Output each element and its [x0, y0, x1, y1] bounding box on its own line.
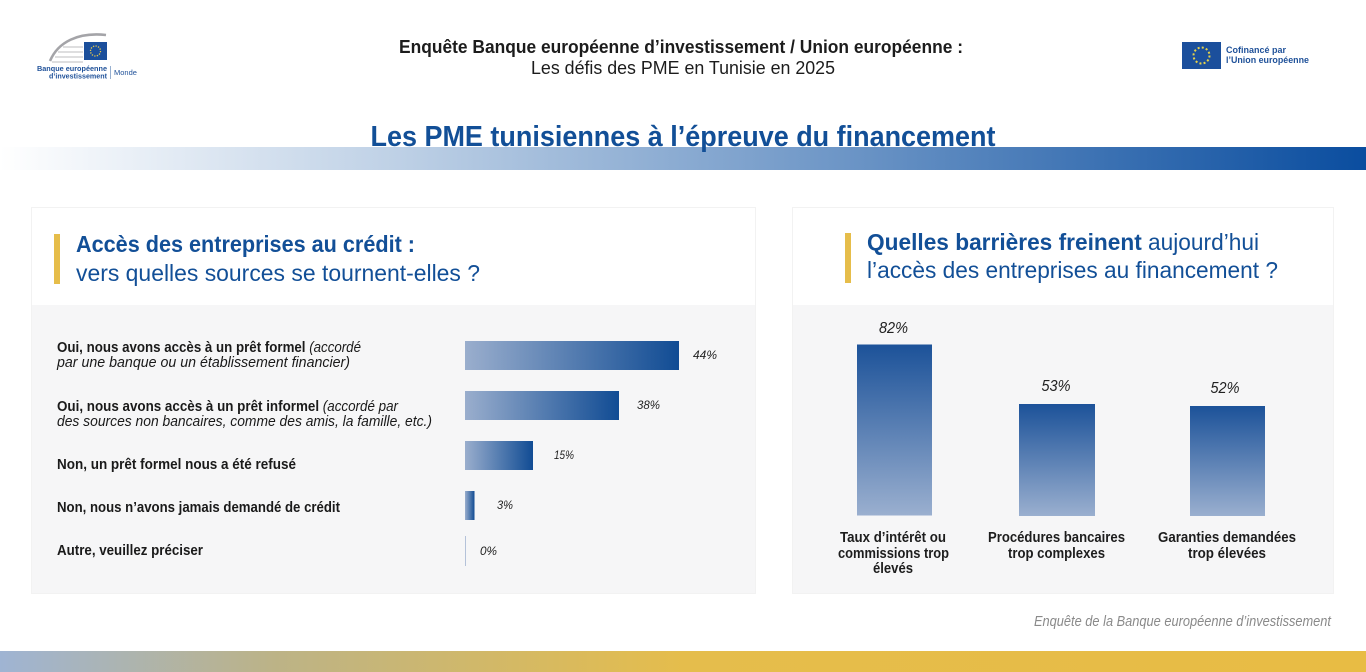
category: complex procedures — [988, 530, 1125, 562]
panel heading: Accès des entreprises au crédit : — [76, 231, 415, 257]
bar chart: barriers: 82% — [879, 320, 908, 337]
logo: Banque européenne d'investissement: Banque européenne — [37, 64, 107, 73]
bar chart: barriers — [857, 320, 1265, 516]
label: other: Autre, veuillez préciser — [57, 543, 203, 559]
logo: Banque européenne d'investissement: d’investissement — [49, 72, 107, 80]
panel: barriers to financing — [792, 208, 1334, 594]
main heading: Les PME tunisiennes à l’épreuve du financement — [370, 121, 996, 153]
label: formal loan: par une banque ou un établissement financier) — [56, 355, 350, 371]
label: informal loan — [57, 399, 432, 430]
bar chart: barriers: 52% — [1210, 380, 1240, 397]
accent bar — [54, 234, 60, 284]
panel heading: l’accès des entreprises au financement ? — [867, 257, 1278, 283]
panel: access to credit — [32, 208, 756, 594]
logo: Banque européenne d'investissement — [37, 34, 137, 80]
bar chart: credit sources: 15% — [554, 450, 574, 462]
accent bar — [845, 233, 851, 283]
bar chart: credit sources: 44% — [693, 350, 717, 362]
logo: EU co-funded: Cofinancé par — [1226, 45, 1286, 56]
bar chart: credit sources: 38% — [637, 400, 660, 412]
label: refused: Non, un prêt formel nous a été refusé — [57, 457, 296, 473]
label: informal loan: des sources non bancaires, comme des amis, la famille, etc.) — [57, 414, 432, 430]
panel heading — [867, 229, 1278, 283]
label: never asked: Non, nous n’avons jamais demandé de crédit — [57, 500, 340, 516]
label: informal loan: Oui, nous avons accès à un prêt informel (accordé par — [57, 399, 399, 415]
panel heading — [76, 231, 480, 286]
category: interest rates: commissions trop — [838, 546, 949, 562]
category: guarantees: Garanties demandées — [1158, 530, 1296, 546]
logo: Banque européenne d'investissement: Monde — [114, 68, 137, 77]
category: complex procedures: trop complexes — [1008, 546, 1105, 562]
bar chart: credit sources: 0% — [480, 546, 497, 558]
gradient band — [0, 147, 1366, 170]
bar chart: credit sources — [465, 341, 717, 566]
category: guarantees: trop élevées — [1188, 546, 1266, 562]
logo: EU co-funded — [1182, 42, 1309, 69]
header title — [399, 36, 963, 78]
panel heading: Quelles barrières freinent aujourd’hui — [867, 229, 1259, 255]
category: guarantees — [1158, 530, 1296, 562]
label: formal loan: Oui, nous avons accès à un prêt formel (accordé — [57, 340, 361, 356]
bar chart: credit sources: 3% — [497, 500, 513, 512]
footer band — [0, 651, 1366, 672]
label: formal loan — [56, 340, 361, 371]
category: interest rates: Taux d’intérêt ou — [840, 530, 946, 546]
category: interest rates: élevés — [873, 561, 913, 577]
bar chart: barriers: 53% — [1042, 378, 1071, 395]
header title: Les défis des PME en Tunisie en 2025 — [531, 57, 835, 78]
header title: Enquête Banque européenne d’investissement / Union européenne : — [399, 36, 963, 57]
logo: EU co-funded: l’Union européenne — [1226, 55, 1309, 66]
category: interest rates — [838, 530, 949, 577]
panel heading: vers quelles sources se tournent-elles ? — [76, 260, 480, 286]
category: complex procedures: Procédures bancaires — [988, 530, 1125, 546]
